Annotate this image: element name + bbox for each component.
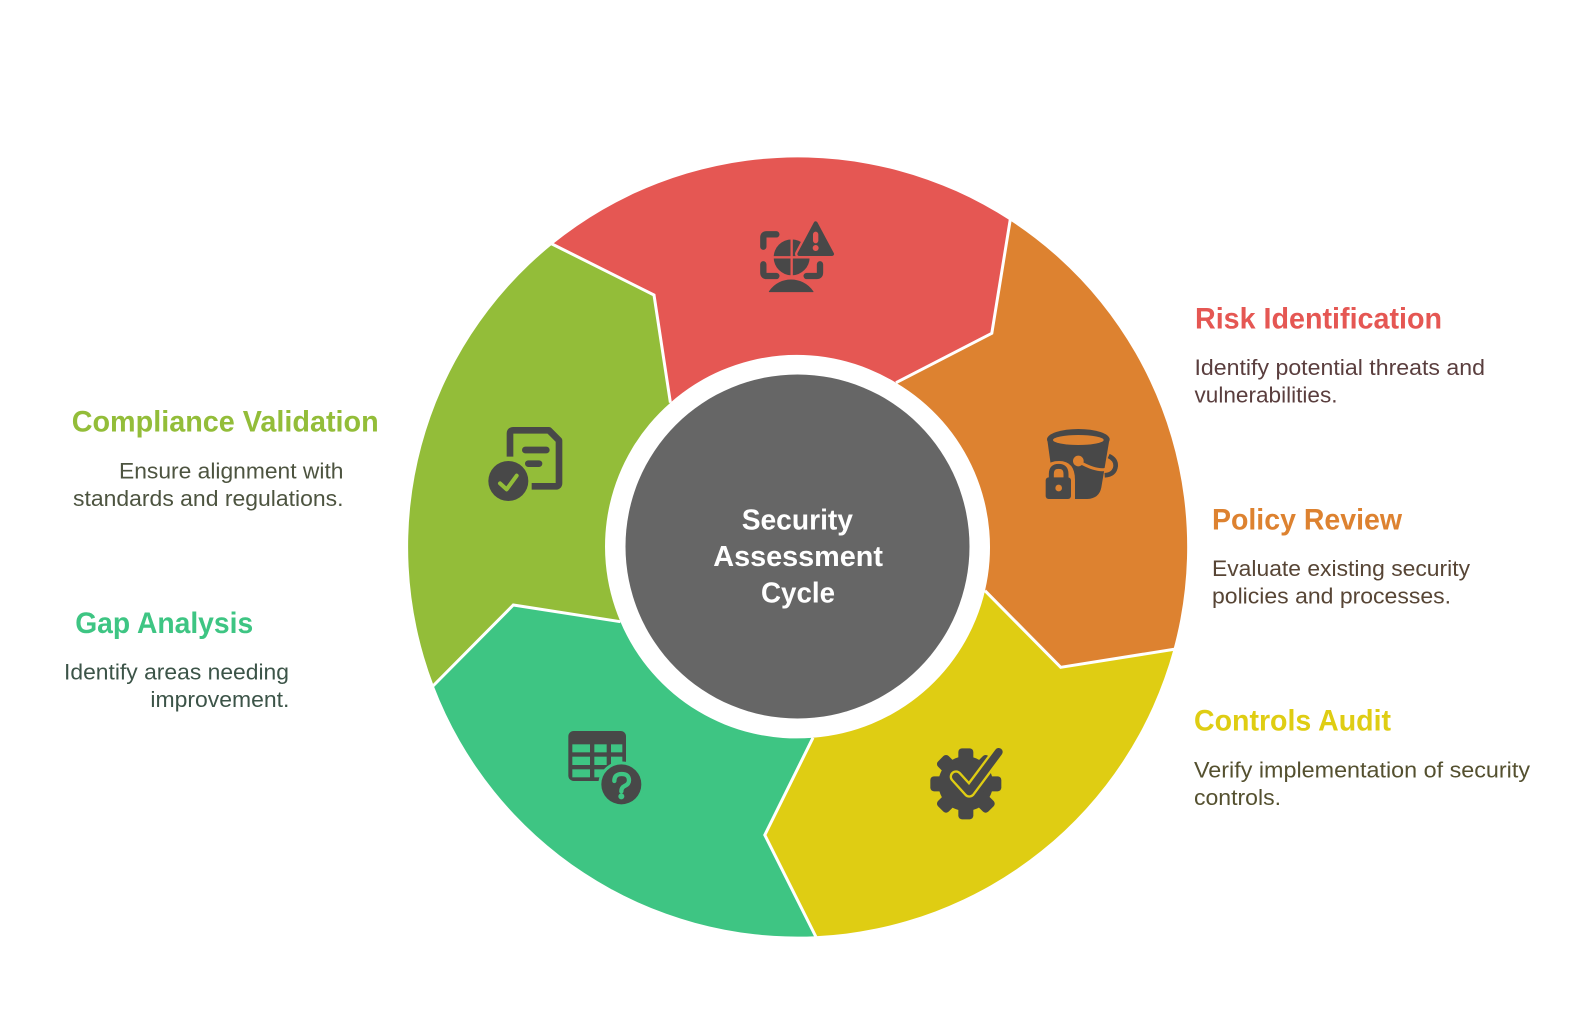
center hub: Security (742, 504, 853, 536)
label: risk identification: vulnerabilities. (1194, 383, 1338, 408)
label: compliance validation: standards and regulations. (73, 486, 344, 511)
label: policy review: Policy Review (1212, 504, 1403, 536)
label: compliance validation: Ensure alignment with (119, 458, 344, 483)
icon: gear with check (930, 748, 1001, 819)
icon: table with question mark (568, 731, 644, 807)
label: compliance validation: Compliance Validation (72, 406, 379, 439)
icon: bucket with lock (1042, 429, 1116, 499)
label: gap analysis: Identify areas needing (64, 660, 289, 684)
label: risk identification: Identify potential threats and (1194, 355, 1485, 380)
label: controls audit: Verify implementation of security (1194, 757, 1530, 782)
icon: risk target with warning (763, 223, 832, 292)
segment: policy review (896, 220, 1187, 667)
label: controls audit (1194, 705, 1530, 810)
center hub: Assessment (713, 541, 883, 573)
label: controls audit: Controls Audit (1194, 705, 1391, 738)
center hub: Cycle (761, 578, 835, 610)
segment: controls audit (765, 591, 1174, 936)
segment: risk identification (552, 157, 1010, 403)
segment: gap analysis (434, 605, 816, 937)
label: policy review: policies and processes. (1212, 584, 1451, 609)
label: policy review: Evaluate existing security (1212, 556, 1470, 581)
label: risk identification (1194, 302, 1485, 408)
center hub (606, 356, 988, 738)
label: compliance validation (72, 406, 379, 511)
label: controls audit: controls. (1194, 785, 1281, 810)
segment: compliance validation (408, 244, 670, 686)
label: gap analysis: improvement. (150, 687, 289, 712)
label: gap analysis: Gap Analysis (75, 607, 253, 640)
icon: document with check (488, 430, 559, 501)
label: risk identification: Risk Identification (1195, 302, 1442, 335)
label: policy review (1212, 504, 1470, 609)
label: gap analysis (64, 607, 289, 712)
